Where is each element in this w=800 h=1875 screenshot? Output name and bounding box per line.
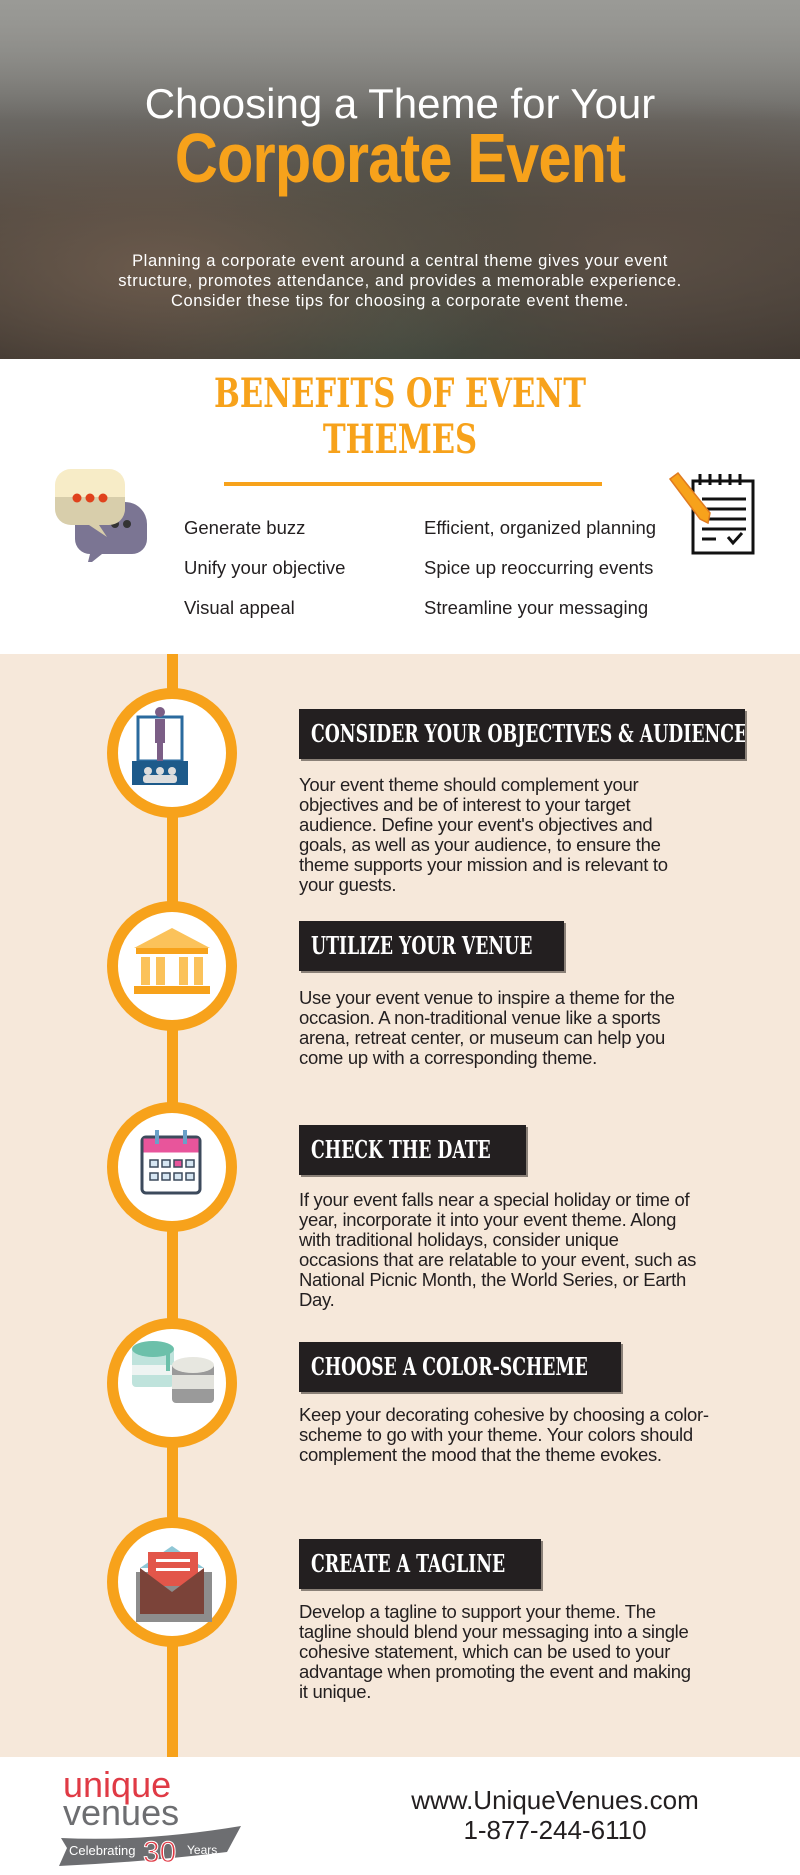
panel: benefits xyxy=(0,359,800,654)
icon: audience circle xyxy=(107,688,237,818)
contact info xyxy=(411,1785,699,1845)
benefits list right: Efficient, organized planning xyxy=(424,517,656,538)
icon: paint cans circle xyxy=(107,1318,237,1448)
heading: tagline xyxy=(299,1539,541,1589)
benefits heading: THEMES xyxy=(323,416,477,463)
intro paragraph: Planning a corporate event around a central theme gives your event structure, promotes attendance, and provides a memorable experience. Consider these tips for choosing a corporate event theme. xyxy=(118,252,682,310)
title line 1: Choosing a Theme for Your xyxy=(145,80,655,127)
benefits list left: Visual appeal xyxy=(184,597,295,618)
icon: envelope circle xyxy=(107,1517,237,1647)
logo: unique xyxy=(63,1764,171,1805)
benefits list right: Spice up reoccurring events xyxy=(424,557,653,578)
logo: Years xyxy=(187,1843,217,1857)
text: tagline: Develop a tagline to support your theme. The tagline should blend your messaging into a single cohesive statement, which can be used to your advantage when promoting the event and making it unique. xyxy=(299,1601,691,1702)
heading: tagline: CREATE A TAGLINE xyxy=(311,1549,505,1578)
panel: tips xyxy=(0,654,800,1757)
benefits heading xyxy=(214,370,586,463)
heading: venue: UTILIZE YOUR VENUE xyxy=(311,931,532,960)
heading: color scheme xyxy=(299,1342,621,1392)
heading: objectives: CONSIDER YOUR OBJECTIVES & AUDIENCE xyxy=(311,719,745,748)
heading: color scheme: CHOOSE A COLOR-SCHEME xyxy=(311,1352,588,1381)
heading: date xyxy=(299,1125,526,1175)
heading: venue xyxy=(299,921,564,971)
benefits list left: Generate buzz xyxy=(184,517,305,538)
benefits list left xyxy=(184,517,345,618)
logo: 30 xyxy=(143,1836,176,1869)
title line 2: Corporate Event xyxy=(175,119,625,197)
logo: venues xyxy=(63,1792,179,1833)
text: objectives: Your event theme should complement your objectives and be of interest to your target audience. Define your event's objectives and goals, as well as your audience, to ensure the theme supports your mission and is relevant to your guests. xyxy=(299,774,668,895)
timeline line xyxy=(167,654,178,1757)
icon: speech bubbles xyxy=(55,469,147,562)
text: date: If your event falls near a special holiday or time of year, incorporate it into your event theme. Along with traditional holidays, consider unique occasions that are relatable to your event, such as National Picnic Month, the World Series, or Earth Day. xyxy=(299,1189,696,1310)
benefits heading: BENEFITS OF EVENT xyxy=(214,370,586,417)
logo xyxy=(59,1764,241,1869)
contact info: 1-877-244-6110 xyxy=(463,1815,647,1845)
hero header xyxy=(0,0,800,359)
icon: calendar circle xyxy=(107,1102,237,1232)
orange divider xyxy=(224,482,602,486)
text: venue: Use your event venue to inspire a theme for the occasion. A non-traditional venue like a sports arena, retreat center, or museum can help you come up with a corresponding theme. xyxy=(299,987,675,1068)
heading: objectives xyxy=(299,709,745,759)
contact info: www.UniqueVenues.com xyxy=(411,1785,699,1815)
text: color scheme: Keep your decorating cohesive by choosing a color-scheme to go with your theme. Your colors should complement the mood that the theme evokes. xyxy=(299,1404,709,1465)
benefits list left: Unify your objective xyxy=(184,557,345,578)
footer xyxy=(0,1757,800,1875)
logo: Celebrating xyxy=(69,1843,136,1858)
benefits list right xyxy=(424,517,656,618)
benefits list right: Streamline your messaging xyxy=(424,597,648,618)
icon: checklist xyxy=(669,472,754,554)
icon: venue circle xyxy=(107,901,237,1031)
heading: date: CHECK THE DATE xyxy=(311,1135,491,1164)
